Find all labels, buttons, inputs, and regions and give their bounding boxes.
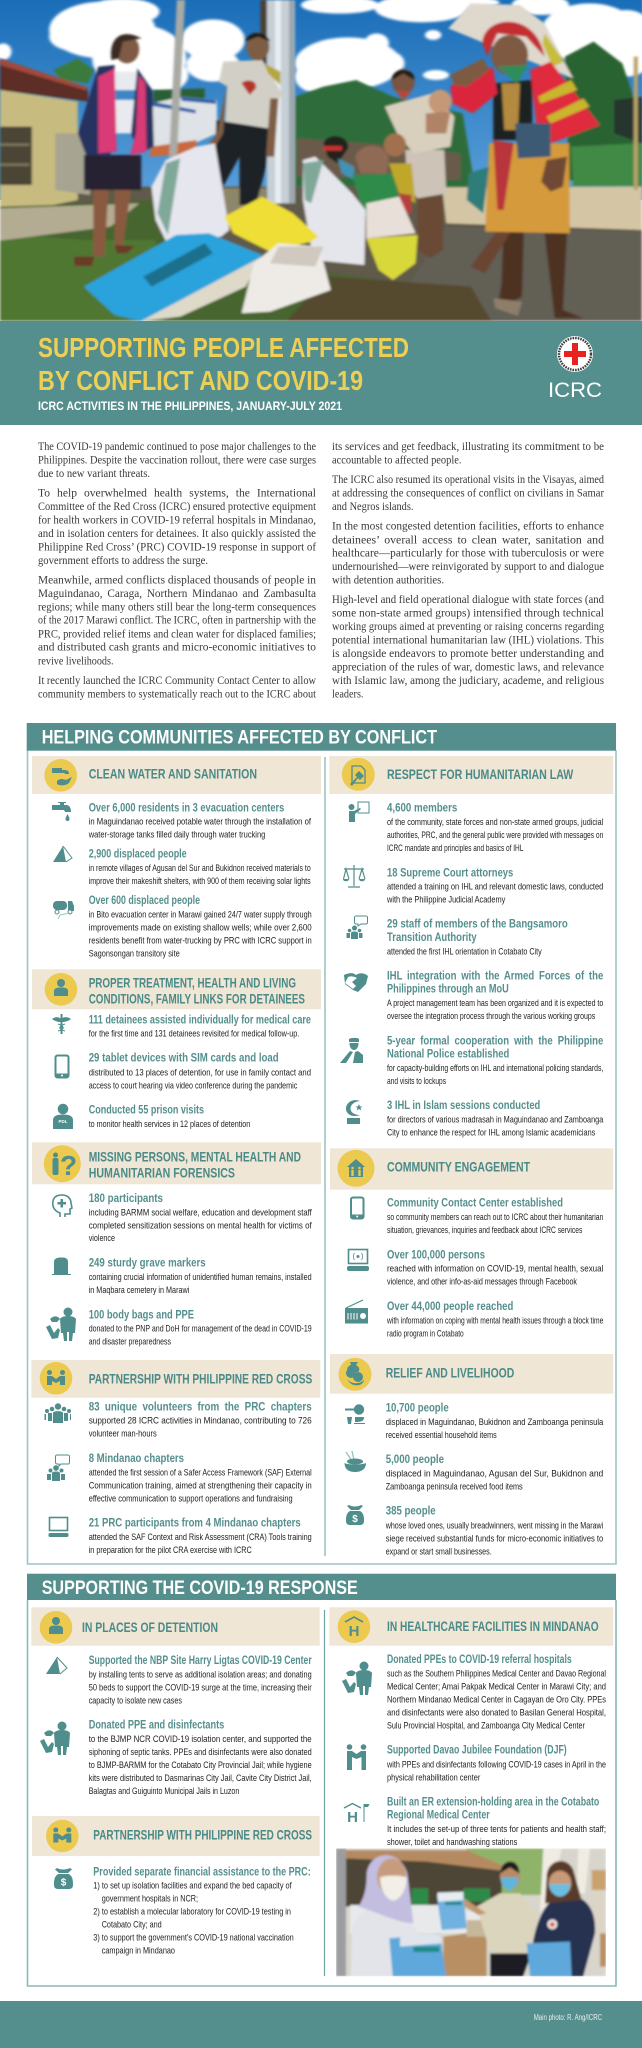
item: donated PPE and disinfectants: kits were distributed to Dasmarinas City Jail, Cavite City District Jail, [89, 1772, 312, 1783]
panel: community engagement [330, 1148, 613, 1339]
item: 8 Mindanao chapters: attended the first session of a Safer Access Framework (SAF) External [89, 1466, 312, 1477]
intro text: left column: and in isolation centers for detainees. It also quickly assisted the [38, 528, 316, 540]
icon: PPE suit [40, 1722, 70, 1755]
item: NBP site: Supported the NBP Site Harry Ligtas COVID-19 Center [89, 1655, 312, 1667]
item: 10,700 people: 10,700 people [386, 1402, 449, 1414]
item: Davao Jubilee Foundation: physical rehabilitation center [387, 1771, 480, 1782]
panel: relief and livelihood [330, 1354, 613, 1556]
item: 4,600 members [348, 802, 603, 853]
panel header [32, 1142, 321, 1184]
item: grave markers: in Maqbara cemetery in Marawi [89, 1284, 189, 1295]
icon: money bag: $ [61, 1878, 67, 1888]
item: financial assistance: Provided separate financial assistance to the PRC: [93, 1866, 311, 1878]
panel: in healthcare facilities in Mindanao [329, 1607, 613, 1976]
item: 2,900 displaced people [53, 846, 311, 886]
item: 29 staff of BTA: Transition Authority [387, 932, 477, 944]
item: financial assistance [54, 1866, 311, 1956]
ICRC logo: ICRC [548, 378, 602, 402]
elderly woman in red traditional dress [448, 3, 600, 318]
icon: group with speech bubble [47, 1455, 70, 1481]
item: body bags and PPE: and disaster preparedness [89, 1336, 171, 1347]
icon: laptop [48, 1518, 68, 1537]
girl in jacket [74, 34, 154, 266]
item: 111 detainees [52, 1014, 311, 1038]
item: 3 IHL in Islam sessions [346, 1100, 604, 1137]
item: 44,000 people reached: Over 44,000 people reached [387, 1301, 513, 1313]
icon: police officer [340, 1038, 363, 1063]
intro text: left column: community members to systematically reach out to the ICRC about [38, 688, 317, 700]
intro text: right column: with detention authorities. [332, 574, 444, 586]
panel header: MISSING PERSONS, MENTAL HEALTH AND [89, 1150, 301, 1165]
item: body bags and PPE [46, 1308, 312, 1347]
intro text: left column: Philippine Red Cross’ (PRC) COVID-19 response in support of [38, 542, 316, 554]
item: 385 people: 385 people [386, 1506, 436, 1518]
item: ER extension: It includes the set-up of three tents for patients and health staff; [387, 1823, 606, 1834]
panel header: RESPECT FOR HUMANITARIAN LAW [387, 767, 574, 782]
item: prison visits: Conducted 55 prison visits [89, 1105, 204, 1117]
item: 180 participants: including BARMM social welfare, education and development staff [89, 1206, 312, 1217]
icon: caduceus [52, 1014, 71, 1034]
panel header [32, 969, 321, 1009]
icon: PDL person [53, 1104, 73, 1129]
item: financial assistance: Cotabato City; and [102, 1919, 162, 1930]
intro text: left column: for health workers in COVID-19 referral hospitals in Mindanao, [38, 515, 316, 527]
item: 21 PRC participants [48, 1518, 312, 1555]
section frame: helping communities [28, 750, 616, 1564]
section frame: COVID-19 response [28, 1600, 616, 1986]
item: 5,000 people [344, 1451, 603, 1492]
item: prison visits: to monitor health services in 12 places of detention [89, 1118, 250, 1129]
panel: respect for humanitarian law [329, 756, 613, 1137]
icon: laptop with broadcast [347, 1250, 369, 1271]
background trees [295, 80, 475, 187]
item: financial assistance: 2) to establish a molecular laboratory for COVID-19 testing in [93, 1906, 291, 1917]
item: 111 detainees: for the first time and 131 detainees revisited for medical follow-up. [89, 1027, 299, 1038]
icon: radio [345, 1300, 368, 1324]
item: body bags and PPE: donated to the PNP and DoH for management of the dead in COVID-19 [89, 1323, 312, 1334]
item: NBP site [46, 1655, 312, 1705]
item: NBP site: by installing tents to serve as additional isolation areas; and donating [89, 1668, 312, 1679]
intro text: left column: regions; while many others still bear the long-term consequences [38, 601, 316, 613]
item: donated PPE and disinfectants: Balagtas and Guiguinto Municipal Jails in Luzon [89, 1785, 239, 1796]
item: donated PPE and disinfectants: to the BJMP NCR COVID-19 isolation center, and supported the [89, 1733, 312, 1744]
item: IHL integration [344, 971, 603, 1021]
item: 6,000 residents [52, 802, 311, 839]
right woman [530, 1895, 595, 1976]
item: ER extension [344, 1797, 606, 1847]
item: 180 participants: 180 participants [89, 1193, 163, 1205]
icon: hospital with flag: H [347, 1809, 358, 1826]
item: financial assistance: campaign in Mindanao [102, 1945, 175, 1956]
intro text: right column [332, 441, 604, 700]
panel: missing persons, mental health and forensics [32, 1142, 321, 1347]
panel header [32, 756, 321, 794]
man in grey shirt [209, 33, 284, 205]
item: IHL integration: Philippines through an MoU [387, 984, 509, 996]
icon: group of people [44, 1403, 71, 1423]
item: 18 Supreme Court attorneys: with the Philippine Judicial Academy [386, 894, 506, 905]
footer band with photo credit: Main photo: R. Ang/ICRC [534, 2013, 602, 2022]
item: over 600 displaced people: Over 600 displaced people [89, 895, 200, 907]
item: 385 people: expand or start small businesses. [386, 1545, 492, 1556]
icon: money bag [54, 1868, 73, 1889]
icon: grave marker [52, 1258, 71, 1275]
panel header: CLEAN WATER AND SANITATION [89, 766, 257, 781]
item: 180 participants: violence [89, 1232, 115, 1243]
item: 44,000 people reached: radio program in Cotabato [387, 1328, 464, 1339]
item: 5-year cooperation: National Police established [387, 1048, 509, 1060]
panel header: IN PLACES OF DETENTION [82, 1620, 218, 1635]
intro text: left column: Philippines. Despite the vaccination rollout, there were case surges [38, 454, 316, 466]
item: 18 Supreme Court attorneys [343, 865, 603, 905]
panel header [32, 1816, 320, 1856]
intro text: right column: appreciation of the rules of war, domestic laws, and relevance [332, 661, 604, 673]
item: 83 volunteers [44, 1401, 312, 1439]
icon: PDL person: PDL [58, 1119, 68, 1124]
footer band with photo credit [0, 2001, 642, 2048]
item: 29 tablet devices: 29 tablet devices with SIM cards and load [89, 1053, 279, 1065]
item: 83 volunteers: supported 28 ICRC activities in Mindanao, contributing to 726 [89, 1415, 312, 1426]
photo: staff holding donated PPE [336, 1848, 606, 1976]
item: 100,000 persons: violence, and other info-as-aid messages through Facebook [387, 1276, 577, 1287]
panel: proper treatment [32, 969, 321, 1129]
panel header: H [349, 1623, 359, 1640]
item: 6,000 residents: in Maguindanao received potable water through the installation of [89, 816, 311, 827]
panel header: HUMANITARIAN FORENSICS [89, 1166, 235, 1181]
item: 2,900 displaced people: improve their makeshift shelters, with 900 of them receiving solar lights [89, 875, 311, 886]
intro text: right column: detainees’ overall access to clean water, sanitation and [332, 534, 604, 546]
intro text: left column: Committee of the Red Cross (ICRC) ensured protective equipment [38, 501, 317, 513]
section heading: supporting the COVID-19 response [27, 1574, 616, 1600]
item: 8 Mindanao chapters [47, 1453, 312, 1503]
item: 29 staff of BTA: 29 staff of members of the Bangsamoro [387, 919, 568, 931]
item: 100,000 persons [347, 1249, 603, 1287]
item: 4,600 members: 4,600 members [387, 803, 457, 815]
icon: handshake [344, 973, 368, 992]
ground: grass, road and gravel [58, 185, 642, 284]
intro text: right column: High-level and field operational dialogue with state forces (and [332, 594, 604, 606]
item: 100,000 persons: Over 100,000 persons [387, 1249, 485, 1261]
icon: PPE suit [46, 1308, 76, 1341]
icon: tent [46, 1657, 67, 1674]
intro text: left column: Meanwhile, armed conflicts displaced thousands of people in [38, 574, 316, 586]
item: over 600 displaced people: Sagonsongan transitory site [89, 947, 180, 958]
intro text: left column: due to new variant threats. [38, 468, 150, 480]
item: Davao Jubilee Foundation [347, 1744, 606, 1782]
item: 6,000 residents: water-storage tanks filled daily through water trucking [88, 828, 265, 839]
panel header [329, 1607, 613, 1646]
intro text: left column: PRC, provided relief items and clean water for displaced families; [38, 628, 316, 640]
panel header [329, 756, 613, 794]
panel header: CONDITIONS, FAMILY LINKS FOR DETAINEES [89, 991, 305, 1006]
item: 18 Supreme Court attorneys: 18 Supreme Court attorneys [387, 867, 513, 879]
panel header: RELIEF AND LIVELIHOOD [386, 1366, 514, 1381]
panel header: PARTNERSHIP WITH PHILIPPINE RED CROSS [89, 1371, 312, 1386]
item: 21 PRC participants: attended the SAF Context and Risk Assessment (CRA) Tools training [89, 1531, 312, 1542]
item: 180 participants [53, 1193, 312, 1243]
icon: PPE suit [342, 1662, 372, 1695]
intro text: right column: leaders. [332, 688, 364, 700]
title: BY CONFLICT AND COVID-19 [38, 364, 363, 396]
ICRC logo [548, 336, 602, 402]
intro text: left column: The COVID-19 pandemic continued to pose major challenges to the [38, 441, 316, 453]
item: 83 volunteers: volunteer man-hours [89, 1428, 157, 1439]
poles [169, 0, 185, 158]
item: ER extension: shower, toilet and handwashing stations [387, 1836, 518, 1847]
item: 5,000 people: displaced in Maguindanao, Agusan del Sur, Bukidnon and [386, 1468, 603, 1479]
seated children [323, 133, 416, 227]
intro text: left column [38, 441, 317, 700]
icon: crescent and star [346, 1100, 362, 1124]
title: SUPPORTING PEOPLE AFFECTED [38, 331, 409, 363]
section heading: helping communities affected by conflict: HELPING COMMUNITIES AFFECTED BY CONFLICT [42, 726, 437, 748]
item: 21 PRC participants: in preparation for the pilot CRA exercise with ICRC [89, 1544, 252, 1555]
title band [0, 321, 642, 425]
item: 83 volunteers: 83 unique volunteers from the PRC chapters [89, 1401, 312, 1413]
left woman [350, 1933, 418, 1976]
item: 5-year cooperation: and visits to lockups [387, 1075, 446, 1086]
intro text: right column: at addressing the consequences of conflict on civilians in Samar [332, 488, 604, 500]
icon: water tap [52, 802, 71, 821]
panel: clean water and sanitation [32, 756, 321, 958]
icon: money bag [346, 1505, 364, 1525]
relief bags [84, 143, 418, 321]
panel: partnership with Philippine Red Cross [31, 1360, 320, 1555]
panel header: PARTNERSHIP WITH PHILIPPINE RED CROSS [93, 1827, 312, 1842]
item: prison visits [53, 1104, 250, 1129]
icon: household items [345, 1404, 365, 1424]
item: IHL integration: IHL integration with the Armed Forces of the [387, 971, 603, 983]
item: 4,600 members: ICRC mandate and principles and basics of IHL [387, 842, 523, 853]
panel: in places of detention [31, 1607, 320, 1796]
item: ER extension: Regional Medical Center [387, 1810, 490, 1822]
panel header [330, 1354, 613, 1394]
icon: tablet [56, 1056, 68, 1078]
intro text: right column: some non-state armed groups) intensified through technical [332, 608, 604, 620]
item: donated PPEs to referral hospitals: Donated PPEs to COVID-19 referral hospitals [387, 1654, 572, 1666]
man [477, 1893, 538, 1957]
intro text: left column: It recently launched the ICRC Community Contact Center to allow [38, 675, 317, 687]
item: 29 tablet devices: access to court hearing via video conference during the pandemic [89, 1079, 298, 1090]
intro text: right column: with Islamic law, among the judiciary, academe, and religious [332, 675, 604, 687]
section heading: supporting the COVID-19 response: SUPPORTING THE COVID-19 RESPONSE [42, 1577, 358, 1599]
item: 5-year cooperation [340, 1035, 603, 1086]
item: 44,000 people reached [345, 1300, 603, 1339]
item: over 600 displaced people: improvements made on existing shallow wells; while over 2,600 [89, 921, 312, 932]
panel header: COMMUNITY ENGAGEMENT [387, 1159, 530, 1174]
intro text: left column: Maguindanao, Caraga, Northern Mindanao and Zambasulta [38, 588, 316, 600]
item: over 600 displaced people: in Bito evacuation center in Marawi gained 24/7 water supply through [89, 908, 312, 919]
item: financial assistance: 3) to support the government’s COVID-19 national vaccination [93, 1932, 294, 1943]
item: 8 Mindanao chapters: Communication training, aimed at strengthening their capacity in [89, 1479, 312, 1490]
intro text: right column: its services and get feedback, illustrating its commitment to be [332, 441, 604, 453]
item: 180 participants: completed sensitization sessions on mental health for victims of [89, 1219, 312, 1230]
main photo: displaced families with relief bags [0, 0, 642, 321]
buildings behind [151, 97, 217, 147]
item: 5,000 people: Zamboanga peninsula received food items [386, 1481, 523, 1492]
icon: group with speech bubble [346, 916, 368, 939]
panel header: ? [60, 1150, 77, 1181]
item: 3 IHL in Islam sessions: 3 IHL in Islam sessions conducted [387, 1100, 540, 1112]
panel header [31, 1360, 320, 1398]
intro text: right column: and Negros islands. [332, 501, 414, 513]
icon: bowl of rice [344, 1451, 366, 1472]
item: donated PPEs to referral hospitals: Sulu Provincial Hospital, and Zamboanga City Medical Center [387, 1720, 585, 1731]
item: 29 tablet devices: distributed to 13 places of detention, for use in family contact and [89, 1066, 311, 1077]
item: donated PPEs to referral hospitals [342, 1654, 606, 1731]
item: 29 staff of BTA: attended the first IHL orientation in Cotabato City [387, 945, 542, 956]
item: donated PPE and disinfectants: siphoning of septic tanks. PPEs and disinfectants were also donated [89, 1746, 312, 1757]
item: 111 detainees: 111 detainees assisted individually for medical care [89, 1014, 311, 1026]
intro text: right column: is alongside endeavors to promote better understanding and [332, 648, 604, 660]
item: 100,000 persons: reached with information on COVID-19, mental health, sexual [387, 1263, 603, 1274]
mother with baby [385, 69, 454, 258]
item: grave markers [52, 1258, 312, 1295]
icon: hospital with flag [344, 1804, 370, 1826]
intro text: right column: healthcare—particularly for those with tuberculosis or were [332, 548, 604, 560]
intro text: right column: undernourished—were reinvigorated by support to and dialogue [332, 561, 604, 573]
icon: tent [53, 846, 72, 862]
icon: head with plus [53, 1195, 72, 1217]
icon: money bag: $ [352, 1514, 358, 1525]
item: 5,000 people: 5,000 people [386, 1454, 444, 1466]
item: Davao Jubilee Foundation: Supported Davao Jubilee Foundation (DJF) [387, 1745, 567, 1757]
boxes [443, 1932, 487, 1976]
item: financial assistance: 1) to set up isolation facilities and expand the bed capacity of [93, 1880, 292, 1891]
item: donated PPE and disinfectants [40, 1720, 312, 1796]
intro text: left column: government efforts to address the surge. [38, 555, 208, 567]
item: community contact center [351, 1197, 603, 1235]
item: 29 staff of BTA [346, 916, 568, 956]
panel header: PROPER TREATMENT, HEALTH AND LIVING [89, 975, 296, 990]
icon: phone [351, 1198, 364, 1218]
intro text: left column: of the 2017 Marawi conflict. The ICRC, often in partnership with the [38, 615, 316, 627]
section heading: helping communities affected by conflict [27, 723, 616, 751]
item: NBP site: 50 beds to support the COVID-19 surge at the time, increasing their [89, 1681, 312, 1692]
intro text: left column: revive livelihoods. [38, 655, 114, 667]
packs [389, 1933, 446, 1976]
item: 8 Mindanao chapters: 8 Mindanao chapters [89, 1453, 184, 1465]
item: 21 PRC participants: 21 PRC participants from 4 Mindanao chapters [89, 1518, 301, 1530]
item: over 600 displaced people [53, 895, 312, 958]
item: 2,900 displaced people: in remote villages of Agusan del Sur and Bukidnon received materials to [89, 862, 311, 873]
item: 10,700 people [345, 1402, 604, 1440]
subtitle: ICRC ACTIVITIES IN THE PHILIPPINES, JANUARY-JULY 2021 [38, 399, 342, 413]
item: 5-year cooperation: 5-year formal cooperation with the Philippine [387, 1035, 603, 1047]
item: 10,700 people: received essential household items [386, 1429, 497, 1440]
item: 6,000 residents: Over 6,000 residents in 3 evacuation centers [89, 802, 284, 814]
item: over 600 displaced people: residents benefit from water-trucking by PRC with ICRC support in [89, 934, 312, 945]
item: 385 people [346, 1505, 603, 1556]
panel header [31, 1607, 320, 1646]
intro text: right column: working groups aimed at preventing or raising concerns regarding [332, 621, 604, 633]
item: 2,900 displaced people: 2,900 displaced people [89, 849, 187, 861]
item: donated PPE and disinfectants: to BJMP-BARMM for the Cotabato City Provincial Jail; while hygiene [89, 1759, 312, 1770]
item: financial assistance: government hospitals in NCR; [102, 1893, 198, 1904]
title [38, 331, 409, 396]
intro text: right column: accountable to affected people. [332, 454, 462, 466]
item: grave markers: containing crucial information of unidentified human remains, installed [89, 1271, 312, 1282]
item: 8 Mindanao chapters: effective communication to support operations and fundraising [89, 1492, 293, 1503]
panel header [330, 1148, 613, 1190]
intro text: left column: and distributed cash grants and micro-economic initiatives to [38, 642, 316, 654]
item: 29 tablet devices [56, 1053, 311, 1090]
item: community contact center: Community Contact Center established [387, 1197, 563, 1209]
item: NBP site: capacity to isolate new cases [89, 1694, 182, 1705]
icon: scales of justice [343, 865, 365, 887]
intro text: left column: To help overwhelmed health systems, the International [38, 488, 316, 500]
panel: partnership with Philippine Red Cross (COVID-19) [32, 1816, 320, 1956]
intro text: right column: potential international humanitarian law (IHL) violations. This [332, 634, 604, 646]
icon: teacher at board [348, 802, 369, 822]
icon: two people shaking hands [347, 1744, 366, 1770]
item: donated PPE and disinfectants: Donated PPE and disinfectants [89, 1720, 224, 1732]
house at left [0, 58, 88, 102]
item: grave markers: 249 sturdy grave markers [89, 1258, 206, 1270]
intro text: right column: In the most congested detention facilities, efforts to enhance [332, 521, 604, 533]
item: body bags and PPE: 100 body bags and PPE [89, 1309, 194, 1321]
intro text: right column: The ICRC also resumed its operational visits in the Visayas, aimed [332, 474, 604, 486]
icon: water truck [53, 901, 74, 919]
